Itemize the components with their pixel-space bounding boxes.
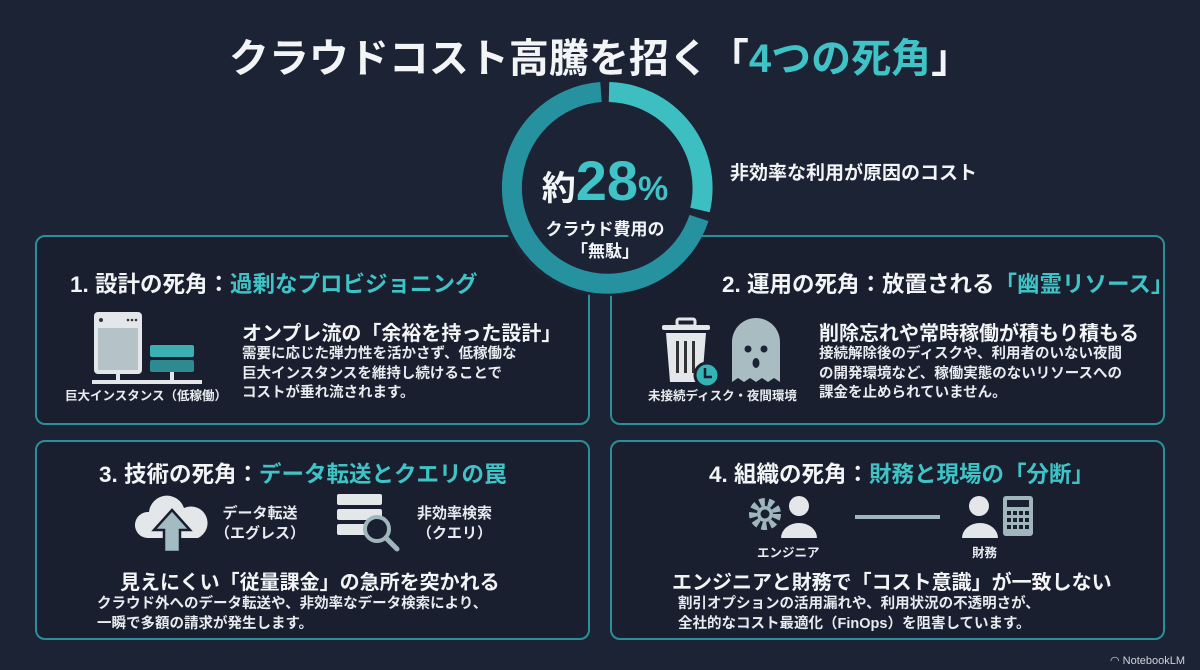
- label: query: [417, 505, 492, 542]
- icon: cloud upload: [134, 496, 208, 551]
- subheading 4: エンジニアと財務で「コスト意識」が一致しない: [672, 572, 1112, 594]
- text 4: 割引オプションの活用漏れや、利用状況の不透明さが、: [678, 596, 1040, 612]
- icon: server search: [337, 494, 400, 552]
- subheading 1: オンプレ流の「余裕を持った設計」: [242, 323, 561, 345]
- heading 3: 3. 技術の死角：データ転送とクエリの罠: [99, 462, 507, 487]
- label: query: （クエリ）: [417, 525, 492, 542]
- heading 2: 2. 運用の死角：放置される「幽霊リソース」: [722, 272, 1173, 297]
- text 1: 需要に応じた弾力性を活かさず、低稼働な: [242, 346, 516, 362]
- donut chart: 「無駄」: [571, 242, 639, 261]
- text 2: [819, 344, 1122, 401]
- label: query: 非効率検索: [417, 505, 492, 522]
- panel: 3 technical: [35, 440, 590, 640]
- text 1: コストが垂れ流されます。: [242, 385, 415, 401]
- title: クラウドコスト高騰を招く「4つの死角」: [229, 37, 971, 81]
- text 1: 巨大インスタンスを維持し続けることで: [242, 366, 502, 382]
- donut chart: [502, 82, 713, 296]
- icon: engineer: [749, 496, 817, 538]
- connector line: [855, 515, 940, 519]
- subheading 3: 見えにくい「従量課金」の急所を突かれる: [120, 572, 500, 594]
- text 2: 課金を止められていません。: [819, 385, 1007, 401]
- caption 1: 巨大インスタンス（低稼働）: [65, 389, 227, 403]
- footer logo: ◠ NotebookLM: [1110, 655, 1185, 667]
- panel: 2 operations: [610, 235, 1165, 425]
- text 3: 一瞬で多額の請求が発生します。: [97, 616, 313, 632]
- text 3: [97, 594, 487, 632]
- label: egress: データ転送: [222, 505, 298, 522]
- text 4: [678, 595, 1040, 632]
- icon: servers: [92, 312, 202, 384]
- panel: 1 design: [35, 235, 590, 425]
- label: finance: 財務: [972, 546, 997, 560]
- donut chart: クラウド費用の: [546, 220, 664, 239]
- panel: 4 organization: [610, 440, 1165, 640]
- caption 2: 未接続ディスク・夜間環境: [648, 389, 797, 403]
- label: egress: [215, 504, 305, 542]
- subheading 2: 削除忘れや常時稼働が積もり積もる: [819, 323, 1139, 345]
- text 3: クラウド外へのデータ転送や、非効率なデータ検索により、: [97, 596, 487, 612]
- text 4: 全社的なコスト最適化（FinOps）を阻害しています。: [678, 616, 1031, 632]
- label: engineer: エンジニア: [757, 546, 820, 560]
- text 2: 接続解除後のディスクや、利用者のいない夜間: [819, 346, 1122, 362]
- text 1: [242, 345, 516, 401]
- text 2: の開発環境など、稼働実態のないリソースへの: [819, 366, 1122, 382]
- icon: trash and ghost: [662, 318, 780, 386]
- donut annotation: 非効率な利用が原因のコスト: [730, 163, 977, 184]
- heading 1: 1. 設計の死角：過剰なプロビジョニング: [70, 272, 478, 297]
- heading 4: 4. 組織の死角：財務と現場の「分断」: [709, 462, 1094, 487]
- icon: finance: [962, 496, 1033, 538]
- donut label: 約28%: [542, 149, 668, 212]
- label: egress: （エグレス）: [215, 525, 305, 542]
